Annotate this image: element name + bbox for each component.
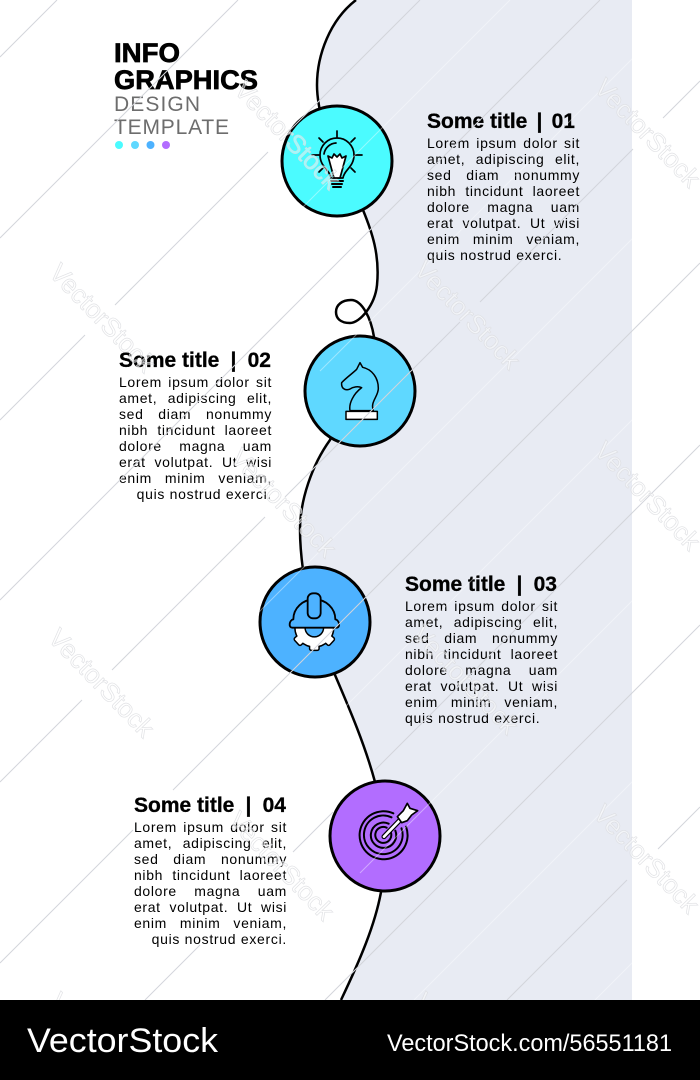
heading: step 01: 01 [552, 110, 575, 133]
watermark overlay: VectorStock [222, 805, 341, 927]
watermark overlay: VectorStock [43, 257, 162, 379]
body text: step 04: quis nostrud exerci. [152, 931, 287, 947]
footer url: VectorStock.com/56551181 [387, 1030, 672, 1057]
body text: step 04: enim minim veniam, [134, 915, 287, 931]
title: INFO GRAPHICS [114, 38, 258, 95]
body text: step 02: quis nostrud exerci. [137, 486, 272, 502]
body text: step 02 [119, 374, 272, 502]
heading: step 04: 04 [263, 794, 286, 817]
body text: step 04 [134, 819, 287, 947]
body text: step 03 [405, 598, 558, 726]
body text: step 03: quis nostrud exerci. [405, 710, 540, 726]
heading: step 04: | [246, 794, 251, 817]
body text: step 03: enim minim veniam, [405, 694, 558, 710]
timeline curve with loop [300, 0, 381, 1000]
body text: step 04: erat volutpat. Ut wisi [134, 899, 287, 915]
circle 2: chess knight [305, 336, 415, 446]
heading: step 02: | [231, 349, 236, 372]
heading: step 03: 03 [534, 573, 557, 596]
body text: step 04: nibh tincidunt laoreet [134, 867, 287, 883]
heading: step 01 [427, 110, 575, 133]
body text: step 04: Lorem ipsum dolor sit [134, 819, 287, 835]
icon: helmet and gear [290, 593, 339, 650]
body text: step 01: sed diam nonummy [427, 167, 580, 183]
body text: step 01: nibh tincidunt laoreet [427, 183, 580, 199]
watermark overlay: VectorStock [228, 74, 347, 196]
body text: step 03: nibh tincidunt laoreet [405, 646, 558, 662]
body text: step 03: Lorem ipsum dolor sit [405, 598, 558, 614]
body text: step 01: enim minim veniam, [427, 231, 580, 247]
circle 4: target and arrow [330, 781, 440, 891]
body text: step 02: nibh tincidunt laoreet [119, 422, 272, 438]
body text: step 02: sed diam nonummy [119, 406, 272, 422]
body text: step 01: Lorem ipsum dolor sit [427, 135, 580, 151]
circle 1: lightbulb [282, 106, 392, 216]
body text: step 02: enim minim veniam, [119, 470, 272, 486]
watermark overlay: VectorStock [42, 622, 161, 744]
body text: step 01: quis nostrud exerci. [427, 247, 562, 263]
body text: step 03: sed diam nonummy [405, 630, 558, 646]
body text: step 04: dolore magna uam [134, 883, 287, 899]
heading: step 01: | [537, 110, 542, 133]
heading: step 03: Some title [405, 573, 505, 596]
circle 3: helmet and gear [260, 567, 370, 677]
watermark overlay: VectorStock [408, 254, 527, 376]
heading: step 03: | [517, 573, 522, 596]
body text: step 02: dolore magna uam [119, 438, 272, 454]
heading: step 01: Some title [427, 110, 527, 133]
subtitle: DESIGN TEMPLATE: DESIGN [114, 93, 200, 116]
subtitle: DESIGN TEMPLATE: TEMPLATE [114, 116, 229, 139]
body text: step 02: erat volutpat. Ut wisi [119, 454, 272, 470]
title: INFO GRAPHICS: GRAPHICS [114, 65, 258, 95]
body text: step 03: erat volutpat. Ut wisi [405, 678, 558, 694]
icon: target and arrow [360, 803, 418, 859]
body text: step 01: dolore magna uam [427, 199, 580, 215]
icon: lightbulb [312, 131, 362, 187]
subtitle: DESIGN TEMPLATE [114, 93, 229, 139]
heading: step 02 [119, 349, 271, 372]
watermark overlay: VectorStock [406, 619, 525, 741]
body text: step 02: amet, adipiscing elit, [119, 390, 272, 406]
body text: step 01 [427, 135, 580, 263]
footer brand: VectorStock [27, 1022, 219, 1060]
heading: step 04 [134, 794, 286, 817]
heading: step 03 [405, 573, 557, 596]
body text: step 02: Lorem ipsum dolor sit [119, 374, 272, 390]
body text: step 01: erat volutpat. Ut wisi [427, 215, 580, 231]
body text: step 04: sed diam nonummy [134, 851, 287, 867]
heading: step 02: 02 [248, 349, 271, 372]
body text: step 01: amet, adipiscing elit, [427, 151, 580, 167]
body text: step 04: amet, adipiscing elit, [134, 835, 287, 851]
body text: step 03: amet, adipiscing elit, [405, 614, 558, 630]
heading: step 02: Some title [119, 349, 219, 372]
title: INFO GRAPHICS: INFO [114, 38, 180, 68]
text block: step 01 [427, 110, 580, 263]
icon: chess knight [342, 363, 378, 419]
panel: curved background [300, 0, 632, 1000]
legend dots [115, 141, 170, 149]
text block: step 02 [119, 349, 272, 502]
text block: step 03 [405, 573, 558, 726]
text block: step 04 [134, 794, 287, 947]
watermark overlay: VectorStock [224, 442, 343, 564]
heading: step 04: Some title [134, 794, 234, 817]
body text: step 03: dolore magna uam [405, 662, 558, 678]
